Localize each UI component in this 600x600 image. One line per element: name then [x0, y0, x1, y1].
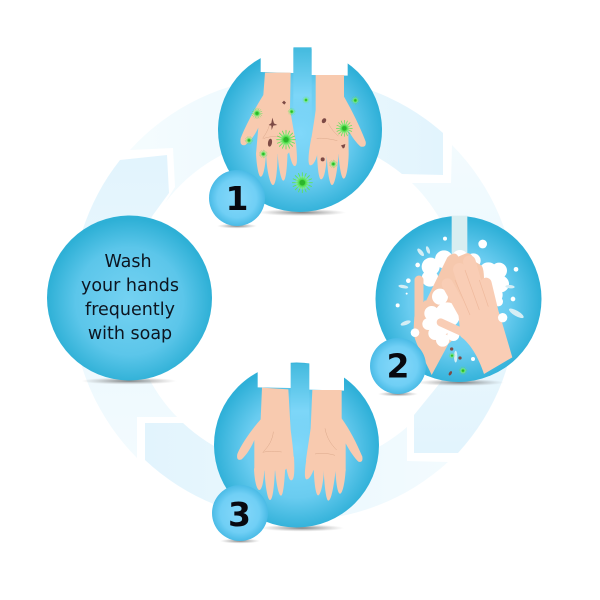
panel: step 2 washing with soap: [370, 216, 542, 396]
text: wash your hands frequently with soap: with soap: [88, 324, 172, 344]
badge: number 2: 2: [387, 346, 409, 386]
text: wash your hands frequently with soap: frequently: [85, 300, 175, 320]
badge: number 1: [209, 170, 265, 228]
arrow: top: [130, 77, 443, 203]
badge: number 1: 1: [226, 179, 248, 218]
back hand: [413, 253, 484, 375]
arrow: left: [72, 155, 177, 458]
panel: main message circle: [47, 216, 212, 384]
badge: number 2: [370, 338, 426, 396]
clean hands: [237, 360, 362, 501]
text: wash your hands frequently with soap: Wash: [104, 252, 152, 272]
washing hands with foam: [396, 216, 525, 376]
arrow: right: [412, 145, 517, 453]
front hand: [441, 262, 512, 374]
hands with germs: [240, 43, 366, 193]
panel: step 3 clean hands: [212, 360, 379, 544]
arrow: bottom: [145, 423, 448, 520]
badge: number 3: 3: [228, 495, 251, 534]
background ring of arrows: [72, 77, 517, 520]
badge: number 3: [212, 485, 268, 544]
panel: step 1 dirty hands: [209, 43, 382, 229]
text: wash your hands frequently with soap: your hands: [81, 276, 179, 296]
